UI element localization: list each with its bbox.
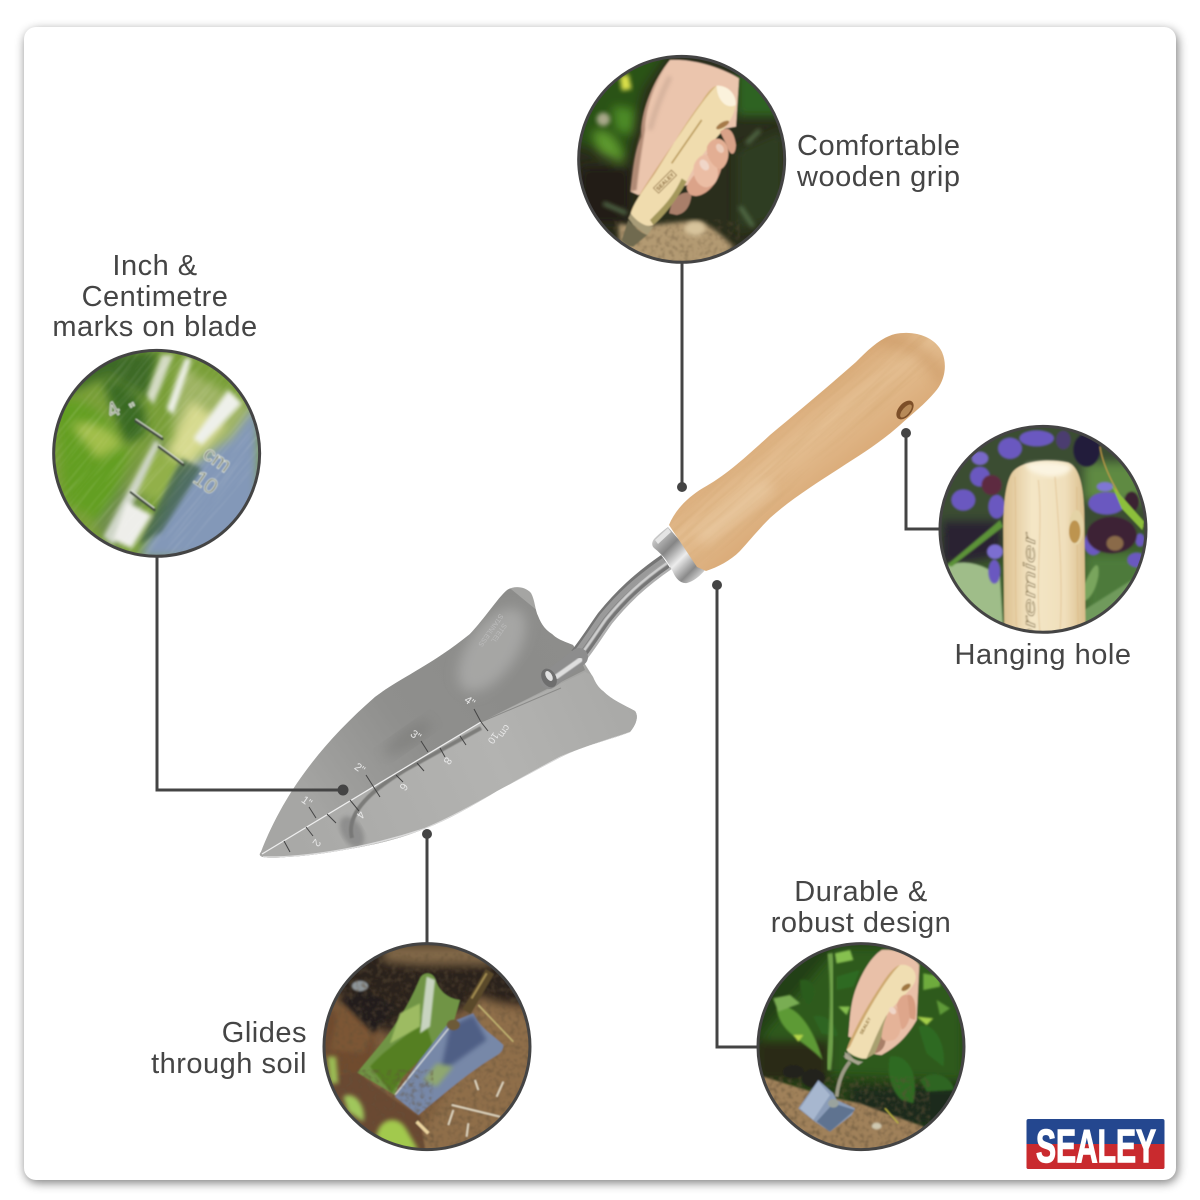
inch and cm numerals: 2 [310,836,323,848]
leader line: wooden grip [677,262,687,492]
wood handle with premier branding [1003,461,1086,640]
inch and cm numerals: 4 [354,808,367,820]
photo circle: glides through soil [320,940,540,1160]
leader line: glides through soil [422,829,432,945]
trowel metal shank [575,560,671,661]
inch and cm numerals: 6 [397,780,410,792]
soil [764,1076,924,1148]
label: inch and centimetre marks on blade: Inch & [112,250,198,282]
fingers over handle [687,167,722,196]
small trowel [798,1080,855,1132]
label: hanging hole: Hanging hole [955,639,1131,671]
hand and handle [848,950,919,1055]
label: inch and centimetre marks on blade: Centimetre [82,281,228,313]
leader line: inch and centimetre marks [157,555,348,796]
inch and cm numerals: cm [495,722,512,739]
photo circle: hand on wooden grip [570,50,790,270]
leader line: hanging hole [901,428,941,529]
inch and cm numerals: 8 [441,754,454,766]
photo circle: inch and centimetre marks: cm [199,441,236,477]
photo circle: inch and centimetre marks: 4 [103,397,124,423]
photo circle: hand on wooden grip: SEALEY [656,172,676,192]
photo circle: durable and robust design: SEALEY [859,1016,872,1035]
label: durable and robust design: Durable & [794,876,928,908]
inch and cm numerals: 1" [299,794,314,810]
inch and cm numerals: 2" [352,761,367,777]
label: comfortable wooden grip: wooden grip [796,161,960,193]
rivet joint [538,657,580,690]
blade centre line [262,722,481,854]
label: inch and centimetre marks on blade: marks on blade [52,311,258,343]
etched marks in close-up [131,421,183,510]
fingers over handle [882,1008,901,1041]
shank [467,972,490,1012]
label: comfortable wooden grip: Comfortable [797,130,960,162]
photo circle: inch and centimetre marks: 10 [189,466,222,499]
label: glides through soil: through soil [151,1048,307,1080]
leader line: durable design [712,580,760,1047]
inch and cm tick marks [284,709,488,852]
label: glides through soil: Glides [222,1017,307,1049]
inch and cm numerals: STAINLESS [476,612,504,648]
inch and cm numerals [299,612,512,848]
metal ferrule [652,527,705,583]
wooden handle in hand [631,86,736,226]
trowel blade in soil [357,973,460,1095]
trowel product [240,218,992,880]
wooden handle [669,332,945,571]
hand [631,60,739,195]
inch and cm numerals: 3" [408,728,423,744]
photo circle: inch and centimetre marks: " [127,399,141,418]
photo circle: hanging hole: premier [1020,530,1039,649]
photo circle: inch and centimetre marks [52,348,262,558]
soil highlights [872,1123,882,1129]
photo circle: hanging hole [938,424,1148,634]
photo circle: durable and robust design [750,940,970,1160]
inch and cm numerals: 10 [485,730,500,746]
inch and cm numerals: 4" [462,694,477,710]
hanging hole in handle [893,397,917,423]
foreground soil [333,1076,426,1148]
purple flowers [950,428,1144,585]
inch and cm numerals: STEEL [489,622,507,644]
label: durable and robust design: robust design [771,907,951,939]
straw details [417,1005,513,1137]
trowel blade [260,587,637,858]
